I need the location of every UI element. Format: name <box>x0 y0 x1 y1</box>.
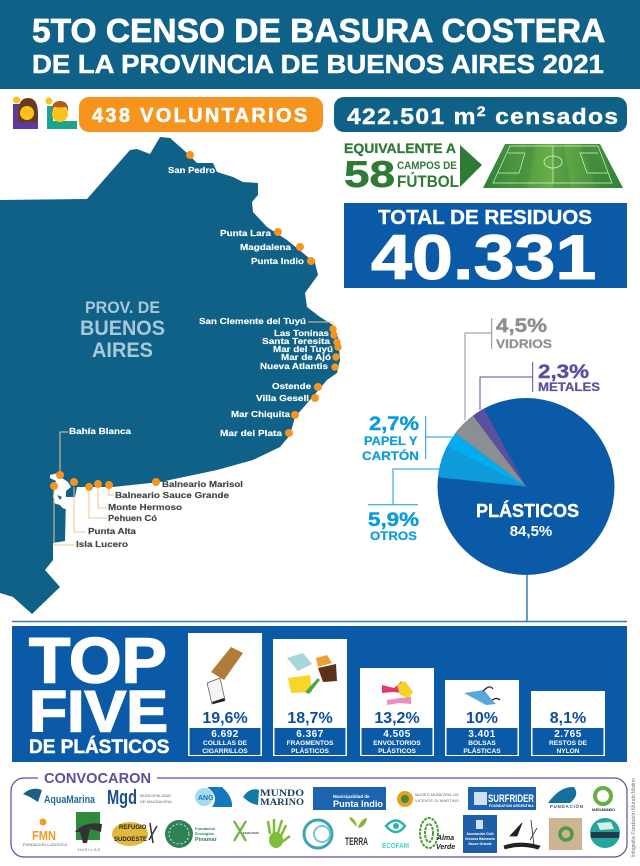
logo: Museo Vicente Di Martino: MUSEO MUNICIPAL DE <box>415 792 459 797</box>
map of Buenos Aires province <box>0 137 342 614</box>
panel: convocaron organizers: CONVOCARON <box>44 770 151 787</box>
total waste panel <box>344 203 627 293</box>
callout: papel y carton: CARTÓN <box>362 449 419 463</box>
card: envoltorios: ENVOLTORIOS <box>373 740 421 747</box>
pie chart: waste composition: PLÁSTICOS <box>476 500 579 521</box>
volunteers pill <box>79 97 323 132</box>
callout: papel y carton: 2,7% <box>369 413 419 435</box>
logo: Mundo Marino: MARINO <box>260 797 304 807</box>
card: bolsas: PLÁSTICAS <box>463 746 501 755</box>
card: restos de nylon: RESTOS DE <box>549 740 588 747</box>
logo: Fundacion Mundo Marino: FUNDACIÓN <box>550 802 583 809</box>
panel: convocaron organizers <box>11 770 627 857</box>
map place names: Mar del Plata <box>220 428 282 438</box>
callout: metales: METALES <box>538 381 600 394</box>
logo: Fundacion Ecologica Pinamar: Pinamar <box>195 837 218 843</box>
map place names: San Pedro <box>168 165 215 175</box>
callout: metales <box>480 362 600 410</box>
card: colillas: 6.692 <box>211 729 239 740</box>
callout: otros: OTROS <box>370 530 417 543</box>
card: envoltorios <box>360 668 434 756</box>
map place names: Mar del Tuyú <box>273 344 333 354</box>
icon: candy wrappers <box>382 681 413 705</box>
logo: Punta Indio: Punta Indio <box>333 799 384 809</box>
map place names: Punta Alta <box>88 526 136 536</box>
logo: Fundacion Mundo Marino <box>548 787 583 809</box>
logo: Terra <box>345 817 368 848</box>
logo: ANG: ANG <box>198 795 214 802</box>
logo: Museo Vicente Di Martino: VICENTE DI MARTINO <box>415 798 459 803</box>
volunteers pill: 438 VOLUNTARIOS <box>92 105 310 127</box>
logo: blue swirl <box>304 820 332 848</box>
logo: round teal <box>590 818 620 848</box>
logo: recycling <box>592 788 615 812</box>
logo: Punta Indio <box>313 787 386 810</box>
map place names: Mar de Ajó <box>281 352 331 362</box>
logo: Refugio del Sudoeste: SUDOESTE <box>114 837 147 843</box>
title header <box>0 0 640 89</box>
logo: Asociacion Civil Vecinos: Vecinos Balneario <box>465 837 495 841</box>
callout: vidrios <box>465 316 552 420</box>
logo: AquaMarina <box>23 789 96 806</box>
map place names: Pehuen Có <box>108 513 157 523</box>
logo: Asociacion Civil Vecinos: Sauce Grande <box>468 842 492 846</box>
card: envoltorios: 13,2% <box>374 710 420 727</box>
logo: Refugio del Sudoeste: REFUGIO <box>119 825 147 831</box>
logo: Magdalena: Mgd <box>107 787 137 809</box>
card: colillas <box>188 633 262 756</box>
logo: DNA <box>234 821 260 841</box>
card: fragmentos: PLÁSTICOS <box>291 746 329 755</box>
logo: DNA: ECOLOGÍA <box>243 830 260 835</box>
logo: Asociacion Civil Vecinos: Asociación Civil <box>466 832 494 836</box>
map place names: Bahía Blanca <box>69 426 131 436</box>
card: fragmentos: 6.367 <box>296 729 324 740</box>
map place names: Magdalena <box>240 242 291 252</box>
map label: province name <box>80 298 165 362</box>
football field equivalence: CAMPOS DE <box>397 161 457 172</box>
logo: AquaMarina: AquaMarina <box>44 794 96 806</box>
title header: 5TO CENSO DE BASURA COSTERA <box>32 13 605 50</box>
callout: vidrios: 4,5% <box>496 316 547 337</box>
pie chart: waste composition <box>438 398 614 575</box>
arrow to field <box>460 145 482 187</box>
map place names: Punta Indio <box>251 256 304 266</box>
card: bolsas <box>445 680 519 756</box>
card: fragmentos <box>273 639 347 756</box>
football field equivalence: FÚTBOL <box>397 171 459 191</box>
image credit: Infografía: Fundación Mundo Marino <box>631 778 637 857</box>
card: bolsas: 3.401 <box>468 729 496 740</box>
total waste panel: 40.331 <box>371 222 596 293</box>
logo: Alma Verde: Alma <box>436 835 454 842</box>
logo: Refugio del Sudoeste <box>112 822 157 846</box>
logo: Mundo Marino <box>243 788 304 807</box>
card: envoltorios: PLÁSTICOS <box>378 746 416 755</box>
card: restos de nylon: NYLON <box>556 748 580 755</box>
card: bolsas: BOLSAS <box>468 740 496 747</box>
card: bolsas: 10% <box>466 710 498 727</box>
callout: otros <box>368 469 439 543</box>
logo: Punta Indio: Municipalidad de <box>333 794 370 799</box>
total waste panel: TOTAL DE RESIDUOS <box>378 207 592 229</box>
logo: Asociacion Civil Vecinos <box>463 815 497 853</box>
map place names: Ostende <box>272 381 311 391</box>
heading: top five: FIVE <box>29 679 168 744</box>
logo: Fundacion Ludovica: FUNDACIÓN LUDOVICA <box>23 842 67 847</box>
logo: Fundacion Ecologica Pinamar: Ecológica <box>195 831 215 836</box>
icon: football field <box>483 144 623 188</box>
title header: DE LA PROVINCIA DE BUENOS AIRES 2021 <box>32 50 604 79</box>
logo: Surfrider: SURFRIDER <box>488 793 534 805</box>
map label: province name: AIRES <box>92 339 153 362</box>
heading: top five <box>29 624 169 758</box>
surveyed area pill: 2 <box>477 105 487 120</box>
logo: Fundacion Ludovica: FMN <box>32 828 56 843</box>
logo: Ecofam <box>382 820 409 850</box>
map place names: Balneario Sauce Grande <box>115 490 229 500</box>
logo: Magdalena: DE MAGDALENA <box>140 799 172 804</box>
card: colillas: CIGARRILLOS <box>202 748 248 755</box>
map place names: Mar Chiquita <box>231 409 290 419</box>
map label: province name: PROV. DE <box>85 298 160 317</box>
card: fragmentos: FRAGMENTOS <box>287 740 334 747</box>
logo: ANG <box>195 787 232 807</box>
map location dots <box>50 151 342 491</box>
map place names: Nueva Atlantis <box>260 361 328 371</box>
card: colillas: COLILLAS DE <box>203 740 248 747</box>
logo: Fundacion Ludovica <box>23 818 67 847</box>
card: envoltorios: 4.505 <box>383 729 411 740</box>
logo: green square: HUELLAS <box>78 847 100 852</box>
card: restos de nylon <box>531 691 605 756</box>
logo: birds <box>504 820 540 849</box>
logo: green hand <box>268 819 290 848</box>
heading: top five: TOP <box>29 624 167 696</box>
logo: Museo Vicente Di Martino <box>397 791 459 807</box>
map place names: Monte Hermoso <box>108 502 182 512</box>
map place names: Punta Lara <box>220 228 271 238</box>
logo: Alma Verde <box>420 818 455 851</box>
logo: Magdalena <box>107 787 172 809</box>
map place names: Balneario Marisol <box>162 479 243 489</box>
logo: Alma Verde: Verde <box>436 844 455 851</box>
panel: top five plastics <box>12 624 627 762</box>
callout: vidrios: VIDRIOS <box>496 337 552 351</box>
card: fragmentos: 18,7% <box>287 710 333 727</box>
icon: plastic bag <box>464 687 500 705</box>
icon: plastic fragments <box>287 653 337 694</box>
callout: papel y carton: PAPEL Y <box>364 434 418 448</box>
callout: papel y carton <box>362 413 452 463</box>
surveyed area pill <box>334 97 627 132</box>
football field equivalence: 58 <box>344 153 395 195</box>
logo: Surfrider <box>468 787 536 810</box>
surveyed area pill: censados <box>487 104 619 129</box>
card: restos de nylon: 2.765 <box>554 729 582 740</box>
logo: Ecofam: ECOFAM <box>382 843 409 850</box>
map place names <box>69 165 333 549</box>
callout: otros: 5,9% <box>368 510 419 531</box>
logo: green square <box>75 812 102 852</box>
map place names: Las Toninas <box>274 328 329 338</box>
map connectors <box>54 322 333 545</box>
heading: top five: DE PLÁSTICOS <box>29 736 169 758</box>
card: colillas: 19,6% <box>202 710 248 727</box>
logo: Terra: TERRA <box>345 836 368 848</box>
logo: Magdalena: MUNICIPALIDAD <box>140 793 171 798</box>
map label: province name: BUENOS <box>80 317 165 340</box>
card: restos de nylon: 8,1% <box>550 710 586 727</box>
football field equivalence <box>344 140 623 195</box>
icon: volunteers raising hands <box>13 96 77 129</box>
map place names: Villa Gesell <box>256 393 309 403</box>
surveyed area pill: 422.501 m <box>347 104 477 129</box>
logo: beige recycling box <box>549 818 582 850</box>
icon: cigarette butt <box>207 647 243 704</box>
logo: Fundacion Ecologica Pinamar <box>165 820 218 848</box>
logo: Surfrider: FOUNDATION ARGENTINA <box>489 804 534 808</box>
logo: Fundacion Ecologica Pinamar: Fundación <box>195 826 216 831</box>
callout: metales: 2,3% <box>538 362 589 383</box>
map place names: San Clemente del Tuyú <box>199 316 306 326</box>
pie chart: waste composition: 84,5% <box>510 523 552 540</box>
map place names: Santa Teresita <box>262 336 330 346</box>
football field equivalence: EQUIVALENTE A <box>344 140 456 156</box>
logo: recycling: M-EG-MUNDO <box>592 807 615 812</box>
logo: Mundo Marino: MUNDO <box>260 788 304 798</box>
map place names: Isla Lucero <box>76 539 128 549</box>
